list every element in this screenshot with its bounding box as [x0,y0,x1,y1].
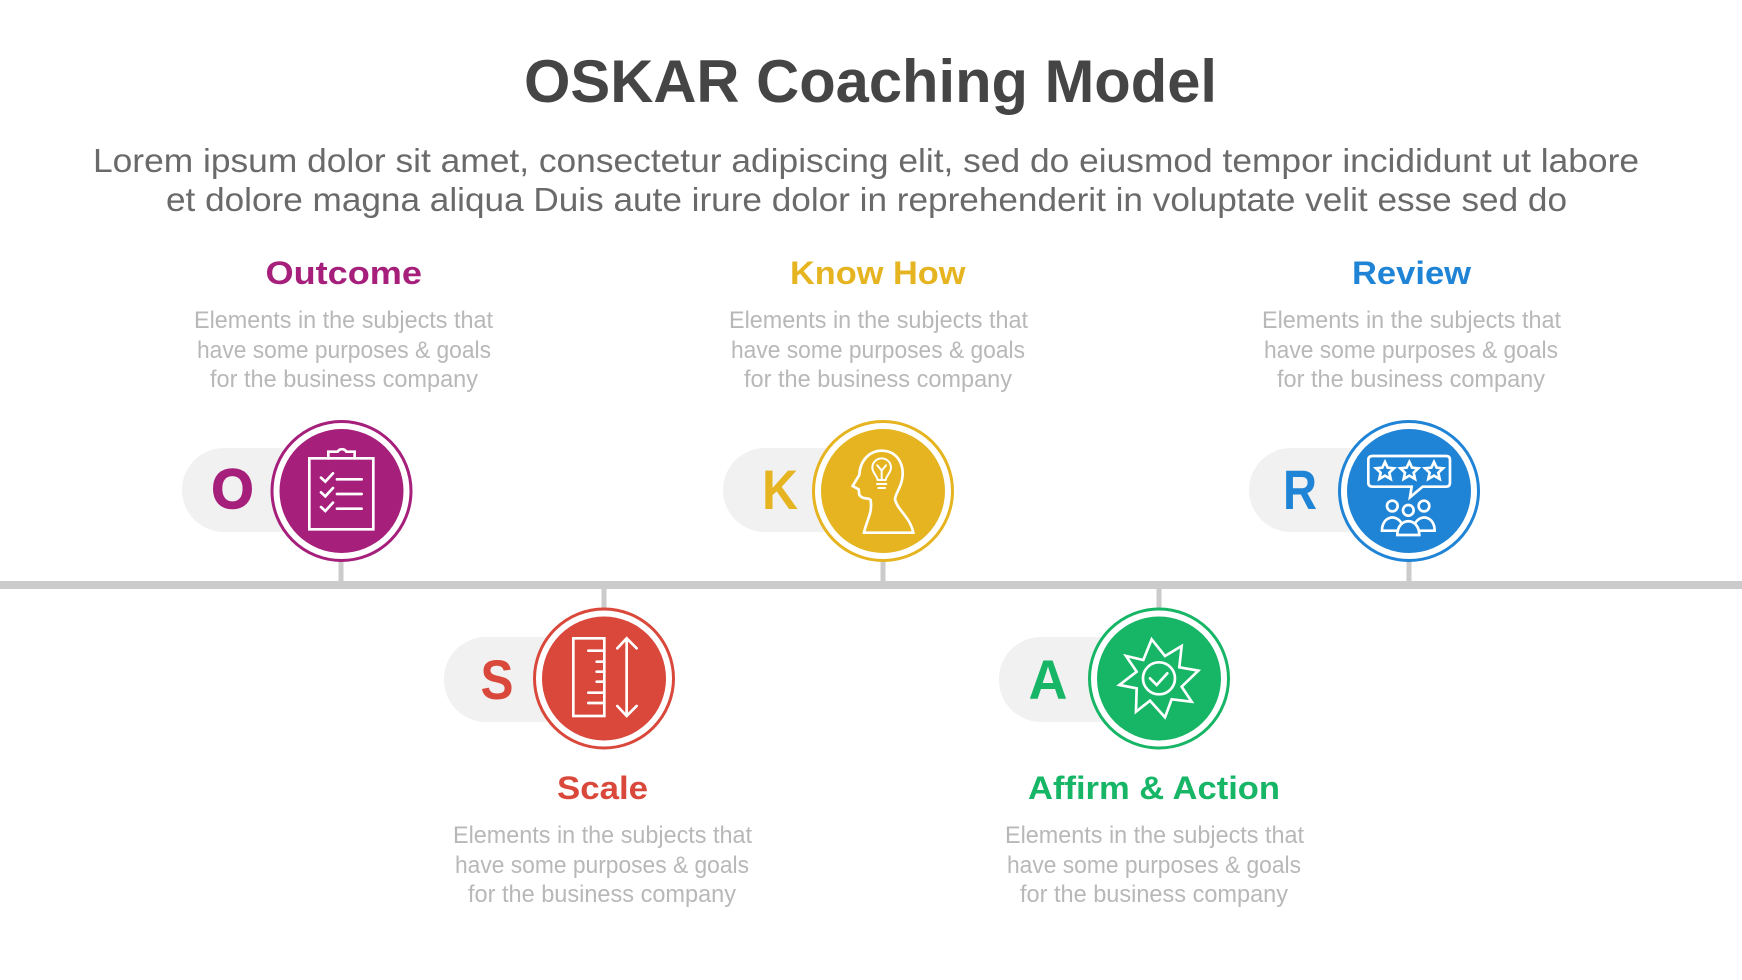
panel: Know How [723,255,1028,560]
icon circle: clipboard [272,422,411,560]
panel: Scale [444,609,752,908]
description: Outcome [194,307,493,393]
description: Review: Elements in the subjects that [1262,307,1561,334]
description: Review [1262,307,1561,393]
description: Affirm & Action: have some purposes & goals [1007,852,1301,879]
description: Affirm & Action: Elements in the subjects that [1005,822,1304,849]
letter pill: S: S [480,648,514,711]
intro text [93,142,1639,218]
description: Outcome: for the business company [210,366,478,393]
description: Know How: Elements in the subjects that [729,307,1028,334]
heading: Affirm & Action: Affirm & Action [1028,770,1280,806]
description: Scale [453,822,752,908]
icon circle: badge with check [1090,609,1228,748]
letter pill: S [444,637,604,722]
icon circle: head with light bulb [814,422,952,560]
letter pill: K: K [762,458,798,521]
title: OSKAR Coaching Model [524,48,1217,115]
letter pill: O: O [212,457,254,520]
description: Know How: have some purposes & goals [731,337,1025,364]
letter pill: O [182,448,342,532]
description: Review: for the business company [1277,366,1545,393]
panel: Review [1249,255,1561,560]
description: Scale: have some purposes & goals [455,852,749,879]
description: Review: have some purposes & goals [1264,337,1558,364]
description: Affirm & Action [1005,822,1304,908]
intro text: Lorem ipsum dolor sit amet, consectetur adipiscing elit, sed do eiusmod tempor incididunt ut labore [93,142,1639,179]
description: Know How [729,307,1028,393]
description: Outcome: have some purposes & goals [197,337,491,364]
letter pill: K [723,448,883,532]
letter pill: R [1249,448,1409,532]
description: Outcome: Elements in the subjects that [194,307,493,334]
panel: Affirm & Action [999,609,1304,908]
timeline axis [0,555,1742,613]
letter pill: A: A [1028,648,1068,711]
icon circle: star rating and people [1340,422,1478,560]
description: Know How: for the business company [744,366,1012,393]
heading: Scale: Scale [557,770,648,806]
description: Scale: Elements in the subjects that [453,822,752,849]
heading: Know How: Know How [790,255,966,291]
letter pill: A [999,637,1159,722]
heading: Review: Review [1352,255,1471,291]
intro text: et dolore magna aliqua Duis aute irure dolor in reprehenderit in voluptate velit esse sed do [166,181,1567,218]
description: Affirm & Action: for the business company [1020,881,1288,908]
heading: Outcome: Outcome [266,255,422,291]
panel: Outcome [182,255,493,560]
icon circle: ruler and arrow [534,609,674,748]
letter pill: R: R [1283,458,1317,521]
description: Scale: for the business company [468,881,736,908]
